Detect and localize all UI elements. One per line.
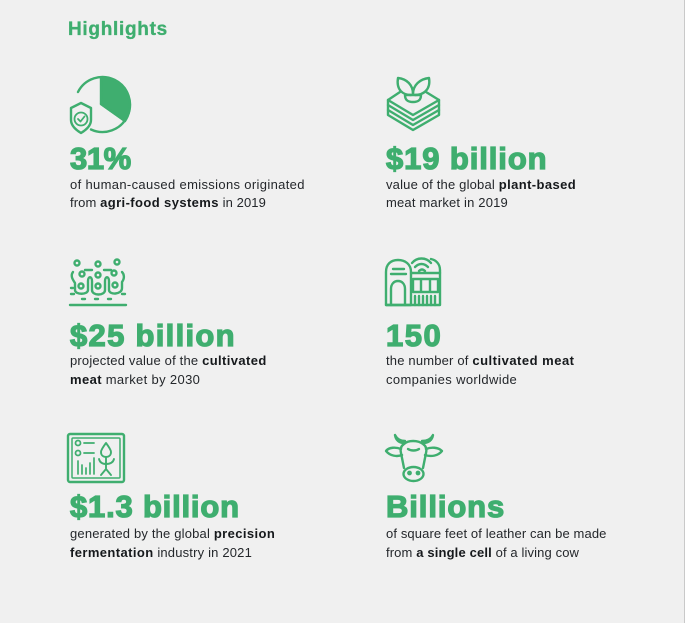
description: value of the global plant-based [386, 177, 576, 192]
icon: dashboard with plant [66, 432, 126, 484]
big number: $19 billion: $19 billion [386, 141, 548, 176]
big number: $1.3 billion: $1.3 billion [70, 489, 240, 524]
panel: billions of square feet of leather [384, 434, 607, 560]
description: meat market in 2019 [386, 195, 508, 210]
description: projected value of the cultivated [70, 353, 267, 368]
big number: $25 billion: $25 billion [70, 318, 236, 353]
title: Highlights [68, 19, 168, 40]
description [70, 526, 275, 560]
description: generated by the global precision [70, 526, 275, 541]
panel: $25 billion cultivated meat [68, 258, 267, 387]
description: from agri-food systems in 2019 [70, 195, 266, 210]
description: fermentation industry in 2021 [70, 545, 252, 560]
icon: cell culture [68, 258, 128, 306]
description: of human-caused emissions originated [70, 177, 305, 192]
panel: $19 billion plant-based [386, 76, 576, 210]
icon: storefront with wifi [384, 257, 442, 306]
panel: $1.3 billion precision fermentation [66, 432, 275, 560]
panel: 150 companies [384, 257, 575, 387]
description: of square feet of leather can be made [386, 526, 607, 541]
big number: 150: 150 [386, 318, 442, 353]
description: meat market by 2030 [70, 372, 200, 387]
description: companies worldwide [386, 372, 517, 387]
big number: 31%: 31% [70, 141, 131, 176]
description [70, 353, 267, 387]
panel: 31% emissions [70, 76, 305, 210]
description: from a single cell of a living cow [386, 545, 579, 560]
big number: Billions: Billions [386, 489, 505, 524]
description: the number of cultivated meat [386, 353, 575, 368]
description [386, 353, 575, 387]
icon: layered plant-based meat [386, 76, 440, 132]
description [70, 177, 305, 210]
description [386, 177, 576, 210]
description [386, 526, 607, 560]
icon: cow head [384, 434, 444, 482]
icon: pie chart with shield [70, 76, 132, 134]
